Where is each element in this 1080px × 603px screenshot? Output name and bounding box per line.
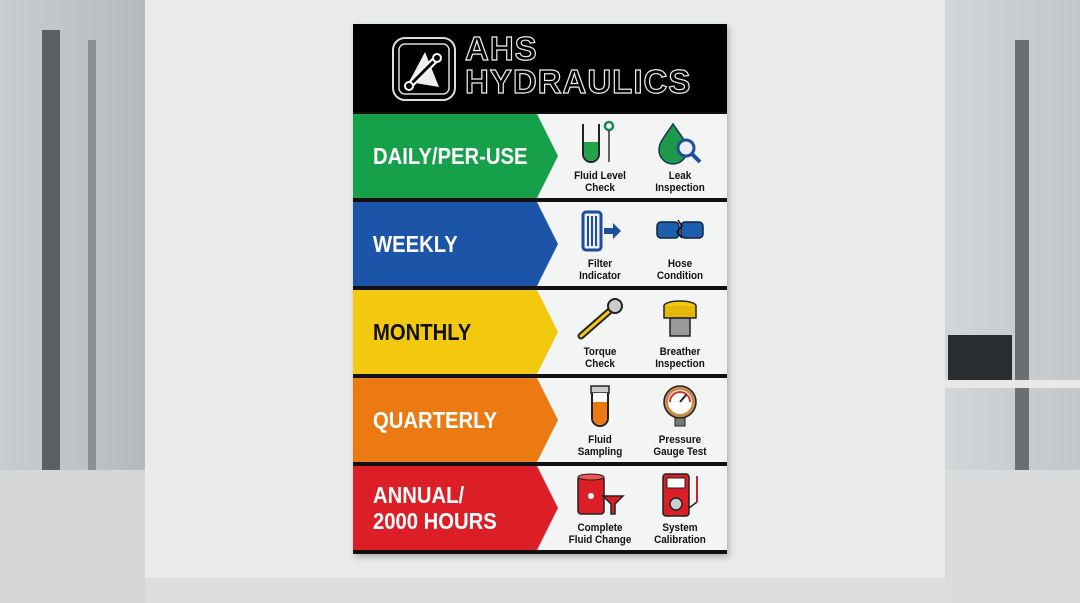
panel: weekly — [353, 202, 727, 286]
panel: annual: Complete — [577, 522, 623, 534]
icon: fluid level — [582, 120, 614, 163]
panel: monthly: Torque — [584, 346, 616, 358]
icon: multimeter — [662, 473, 698, 517]
panel: quarterly: QUARTERLY — [373, 407, 497, 433]
panel: weekly: Filter — [588, 258, 612, 270]
panel: monthly: Inspection — [655, 358, 705, 370]
panel: weekly: Indicator — [579, 270, 621, 282]
icon: breather cap — [663, 300, 697, 337]
panel: quarterly: Fluid — [588, 434, 612, 446]
panel: monthly: MONTHLY — [373, 319, 471, 345]
icon: hose — [656, 220, 704, 239]
title text — [465, 30, 691, 100]
panel: quarterly: Sampling — [578, 446, 622, 458]
panel: daily: Inspection — [655, 182, 705, 194]
panel: annual: System — [662, 522, 698, 534]
panel: weekly: WEEKLY — [373, 231, 458, 257]
panel: monthly — [353, 290, 727, 374]
panel: annual: Calibration — [654, 534, 706, 546]
panel: monthly: Check — [585, 358, 615, 370]
panel: quarterly: Pressure — [659, 434, 701, 446]
icon: pressure gauge — [663, 385, 697, 426]
panel: daily: Fluid Level — [574, 170, 626, 182]
panel: daily: Leak — [669, 170, 691, 182]
panel: weekly: Hose — [668, 258, 692, 270]
panel: annual — [353, 466, 727, 550]
panel: quarterly — [353, 378, 727, 462]
title text: AHS — [465, 30, 538, 67]
icon: torque wrench — [578, 298, 623, 340]
panel: annual: 2000 HOURS — [373, 508, 497, 534]
header: AHS Hydraulics logo — [353, 24, 727, 112]
panel: monthly: Breather — [660, 346, 700, 358]
title text: HYDRAULICS — [465, 63, 691, 100]
panel: daily — [353, 114, 727, 198]
panel: annual: ANNUAL/ — [373, 482, 464, 508]
panel: daily: DAILY/PER-USE — [373, 143, 527, 169]
icon: logo emblem — [392, 37, 456, 101]
icon: sample tube — [590, 385, 610, 427]
poster — [353, 24, 727, 554]
icon: drum and funnel — [577, 474, 625, 515]
panel: quarterly: Gauge Test — [653, 446, 707, 458]
panel: annual: Fluid Change — [569, 534, 631, 546]
icon: leak — [658, 122, 702, 165]
icon: filter — [582, 210, 621, 252]
panel: daily: Check — [585, 182, 615, 194]
panel: weekly: Condition — [657, 270, 703, 282]
